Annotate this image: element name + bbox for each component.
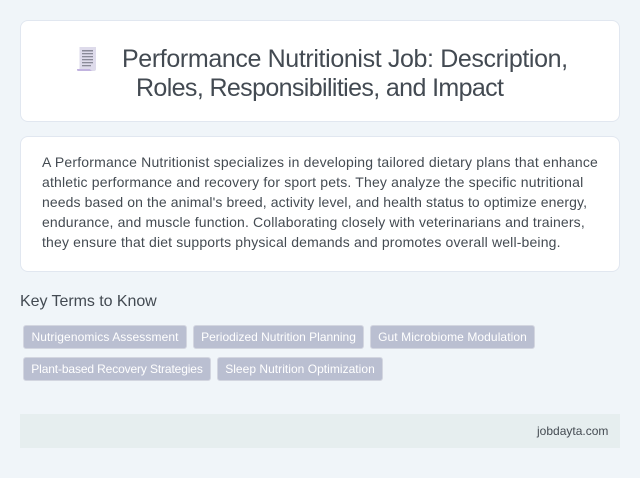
description text: athletic performance and recovery for sport pets. They analyze the specific nutritional [42, 174, 583, 190]
tag: Periodized Nutrition Planning [201, 330, 356, 344]
description text: A Performance Nutritionist specializes in developing tailored dietary plans that enhance [42, 154, 598, 170]
tag: Nutrigenomics Assessment [31, 330, 179, 344]
tag [23, 325, 187, 349]
tag [217, 357, 383, 381]
footer bar [20, 414, 620, 448]
heading: key terms: Key Terms to Know [20, 293, 157, 310]
description text [42, 154, 598, 250]
tag: Sleep Nutrition Optimization [225, 362, 375, 376]
title: Performance Nutritionist Job: Description, [122, 45, 568, 73]
tag: Plant-based Recovery Strategies [31, 362, 203, 376]
footer brand: jobdayta.com [537, 424, 608, 438]
description text: needs based on the animal's breed, activity level, and health status to optimize energy, [42, 194, 587, 210]
panel: description [20, 136, 620, 272]
icon: document scroll [77, 47, 96, 71]
panel: title card [20, 20, 620, 122]
tag [193, 325, 364, 349]
tag [370, 325, 535, 349]
tag: Gut Microbiome Modulation [378, 330, 527, 344]
description text: endurance, and muscle function. Collaborating closely with veterinarians and trainers, [42, 214, 585, 230]
tag [23, 357, 211, 381]
title line 2: Roles, Responsibilities, and Impact [136, 74, 503, 102]
description text: they ensure that diet supports physical demands and promotes overall well-being. [42, 234, 561, 250]
